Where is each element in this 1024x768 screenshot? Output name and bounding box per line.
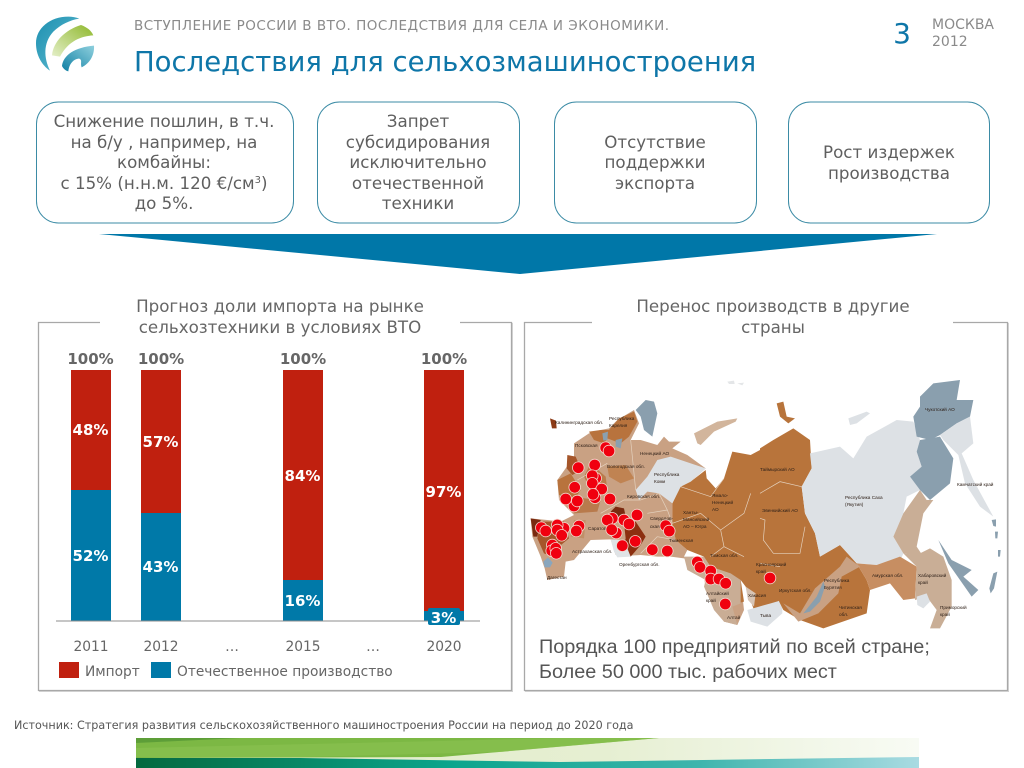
region labels: край [940,611,950,617]
card: subsidies: техники [382,193,454,213]
bar chart: 100% [421,350,467,368]
region labels: Чукотский АО [925,406,955,412]
bar chart: 84% [285,467,320,485]
panel heading: import forecast: Прогноз доли импорта на рынке [136,296,424,316]
location and year [932,17,994,50]
eastern regions [760,380,1001,628]
region labels: Ненецкий [712,499,734,505]
region labels [547,406,994,620]
region labels: (Якутия) [845,502,864,507]
card: subsidies: отечественной [352,173,484,193]
bar chart: 3% [431,609,456,627]
region labels: Тюменская [669,538,694,543]
card: subsidies: Запрет [387,111,449,131]
arrow: down [99,234,937,274]
card: export: поддержки [604,152,706,172]
map of Russia [531,380,1001,628]
bar chart: 48% [73,421,108,439]
region labels: ская [650,524,660,529]
region labels: Республика [824,578,850,583]
page number: 3 [893,17,911,50]
region labels: Иркутская обл. [779,588,812,593]
location and year: 2012 [932,34,968,50]
card: costs: производства [828,163,950,183]
region labels: Саратов [588,526,607,531]
source note: Источник: Стратегия развития сельскохозяйственного машиностроения России на период до 2020 года [14,719,633,732]
bar chart: 2011 [73,639,109,655]
region labels: Эвенкийский АО [762,507,798,513]
relocated enterprises markers [536,442,776,610]
region labels: Дагестан [547,575,567,580]
region labels: край [756,568,766,574]
card: export [554,102,756,223]
bar chart: 97% [426,483,461,501]
bar chart: 16% [285,592,320,610]
bar chart: 100% [67,350,114,368]
region labels: АО [712,507,719,512]
panel heading: relocation: страны [741,317,805,337]
card: costs: Рост издержек [823,142,955,162]
region labels: Оренбургская обл. [619,562,660,567]
panel heading: import forecast: сельхозтехники в условиях ВТО [139,317,421,337]
bar chart: … [225,639,239,655]
region labels: Свердлов- [650,516,674,521]
region labels: Амурская обл. [872,573,903,578]
region labels: Республика [654,472,680,477]
region labels: АО – Югра [683,524,707,529]
region labels: Кировская обл. [627,494,660,499]
bar chart: 2012 [143,639,179,655]
logo [36,17,94,71]
title: Последствия для сельхозмашиностроения [134,46,756,78]
region labels: Приморский [940,604,967,610]
region labels: Алтайский [706,590,729,596]
bar chart [56,350,480,655]
region labels: Республика Саха [845,495,883,500]
card: tariffs: комбайны: [117,152,211,172]
region labels: Ненецкий АО [640,450,669,456]
card: subsidies: субсидирования [346,132,490,152]
region labels: Красноярский [756,561,787,567]
region labels: Томская обл. [710,553,738,558]
card: export: Отсутствие [604,132,706,152]
region labels: Тыва [760,613,771,618]
legend: Отечественное производство [177,664,393,680]
region labels: Хакасия [748,593,766,598]
card: tariffs: Снижение пошлин, в т.ч. [54,111,274,131]
bar chart: 43% [143,558,178,576]
card: tariffs: до 5%. [135,193,193,213]
bar chart: 2020 [426,639,462,655]
legend: Импорт [85,664,140,680]
region labels: Астраханская обл. [572,549,612,554]
region labels: Мансийский [683,516,710,522]
region labels: Ханты- [683,510,699,515]
region labels: край [918,579,928,585]
region labels: Читинская [839,605,862,610]
legend [59,662,393,680]
bar chart: 100% [138,350,184,368]
header eyebrow: ВСТУПЛЕНИЕ РОССИИ В ВТО. ПОСЛЕДСТВИЯ ДЛЯ СЕЛА И ЭКОНОМИКИ. [134,18,669,34]
region labels: Карелия [609,423,628,428]
bar chart: … [366,639,380,655]
region labels: Ямало- [712,493,729,498]
card: export: экспорта [615,173,695,193]
map caption [539,636,930,683]
card: tariffs: ) [261,173,268,193]
bar chart: 100% [280,350,326,368]
card: subsidies [318,102,520,223]
panel heading: relocation [636,296,910,337]
map caption: Порядка 100 предприятий по всей стране; [539,636,930,658]
region labels: край [706,597,716,603]
bar chart: 57% [143,433,178,451]
card: tariffs: 3 [255,175,261,186]
region labels: Республика [609,416,635,421]
card: tariffs: с 15% (н.н.м. 120 €/см [60,173,255,193]
region labels: Вологодская обл. [607,464,645,469]
bar chart: 2015 [285,639,321,655]
bar chart: 52% [73,547,108,565]
region labels: Бурятия [824,585,842,590]
region labels: Таймырский АО [760,466,795,472]
region labels: Псковская [575,443,598,448]
region labels: Хабаровский [918,572,947,578]
map caption: Более 50 000 тыс. рабочих мест [539,661,837,683]
region labels: Коми [654,479,666,484]
location and year: МОСКВА [932,17,994,33]
card: tariffs: на б/у , например, на [71,132,257,152]
region labels: Камчатский край [957,481,994,487]
region labels: Калининградская обл. [555,420,603,425]
region labels: обл. [839,612,848,617]
panel heading: relocation: Перенос производств в другие [636,296,910,316]
western and central regions [531,381,787,627]
card: costs [788,102,990,223]
region labels: Алтай [727,614,741,620]
card: tariffs [36,102,294,223]
panel heading: import forecast [136,296,424,337]
panel: relocation [524,296,1008,692]
footer band [136,738,919,768]
panel: import forecast [38,296,512,692]
card: subsidies: исключительно [349,152,487,172]
